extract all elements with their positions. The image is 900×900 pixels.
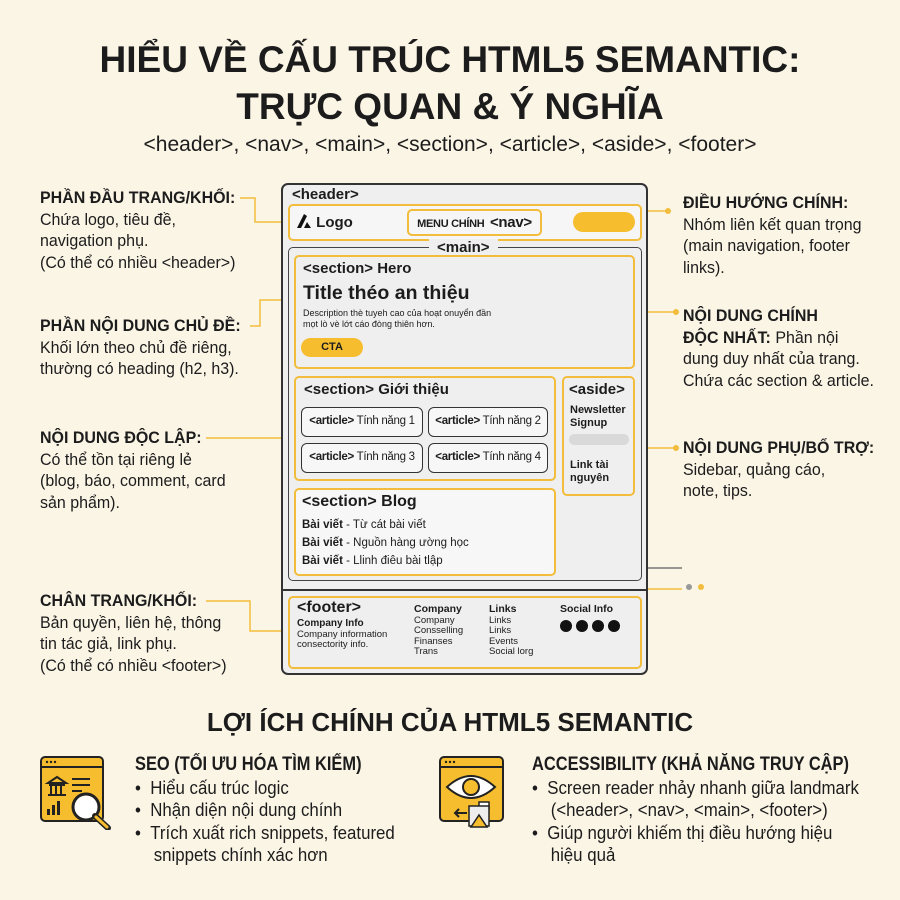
label: main: NỘI DUNG CHÍNH (683, 306, 818, 325)
hero section: Description thè tuyeh cao của hoạt onuyển đần (303, 308, 491, 318)
footer box: Company information (297, 628, 387, 640)
icon: accessibility (439, 756, 504, 828)
label: section (40, 316, 241, 378)
footer box: Trans (414, 646, 438, 657)
label: article: Có thể tồn tại riêng lẻ (40, 450, 192, 468)
footer box: Company (414, 614, 455, 626)
benefits heading: LỢI ÍCH CHÍNH CỦA HTML5 SEMANTIC (207, 707, 693, 737)
pill (573, 212, 635, 232)
aside: Link tài (570, 459, 609, 471)
subtitle: <header>, <nav>, <main>, <section>, <article>, <aside>, <footer> (144, 133, 756, 156)
label: aside (683, 438, 874, 500)
text: accessibility: ACCESSIBILITY (KHẢ NĂNG TRUY CẬP) (532, 754, 849, 775)
label: header: navigation phụ. (40, 231, 148, 250)
text: seo: • Hiểu cấu trúc logic (135, 776, 289, 798)
title (100, 38, 800, 127)
aside: Newsletter (570, 404, 626, 416)
label: main (683, 306, 874, 390)
label: section: Khối lớn theo chủ đề riêng, (40, 338, 232, 356)
social icons (560, 620, 620, 632)
footer box: Social lorg (489, 646, 533, 657)
section gioi thieu: <article> Tính năng 1 (309, 415, 415, 427)
section gioi thieu: <article> Tính năng 4 (435, 451, 541, 463)
text: seo: • Trích xuất rich snippets, featured (135, 822, 395, 842)
label: footer: Bản quyền, liên hệ, thông (40, 612, 221, 632)
nav: MENU CHÍNH <nav> (417, 214, 532, 231)
label: header: (Có thể có nhiều <header>) (40, 252, 235, 272)
title: HIỂU VỀ CẤU TRÚC HTML5 SEMANTIC: (100, 39, 800, 80)
blog section (294, 488, 556, 576)
section gioi thieu (294, 376, 556, 481)
hero section: mọt lò vè lớt cáo đòng thiên hơn. (303, 319, 435, 329)
aside: <aside> (569, 381, 625, 398)
wireframe (281, 183, 648, 675)
label: article (40, 428, 226, 512)
aside (562, 376, 635, 496)
blog section: <section> Blog (302, 493, 417, 510)
label: article: (blog, báo, comment, card (40, 471, 226, 490)
footer box: Links (489, 603, 516, 615)
text: accessibility (532, 753, 859, 865)
text: seo (135, 753, 395, 865)
text: seo: SEO (TỐI ƯU HÓA TÌM KIẾM) (135, 754, 362, 775)
footer box: Consselling (414, 625, 463, 636)
label: section: thường có heading (h2, h3). (40, 359, 239, 378)
nav (407, 209, 542, 236)
blog section: Bài viết - Nguồn hàng ường học (302, 537, 469, 549)
label: nav: links). (683, 258, 725, 276)
footer divider (281, 589, 648, 591)
footer box: Links (489, 614, 511, 626)
text: accessibility: • Giúp người khiếm thị điều hướng hiệu (532, 822, 832, 842)
hero section (294, 255, 635, 369)
logo: Logo (316, 214, 353, 231)
title: TRỰC QUAN & Ý NGHĨA (236, 86, 664, 127)
label: footer (40, 591, 227, 674)
label: main: Chứa các section & article. (683, 370, 874, 390)
footer box: Company Info (297, 618, 364, 629)
text: seo: snippets chính xác hơn (154, 844, 328, 865)
hero section: CTA (321, 341, 343, 353)
label: article: sản phẩm). (40, 492, 120, 512)
text: seo: • Nhận diện nội dung chính (135, 799, 342, 820)
text: accessibility: hiệu quả (551, 844, 615, 865)
label: nav: ĐIỀU HƯỚNG CHÍNH: (683, 193, 848, 212)
section gioi thieu: <article> Tính năng 3 (309, 451, 415, 463)
footer box: <footer> (297, 599, 361, 616)
label: article: NỘI DUNG ĐỘC LẬP: (40, 428, 202, 447)
label: header (40, 188, 235, 272)
label: nav: (main navigation, footer (683, 236, 850, 255)
main box (288, 247, 642, 581)
text: accessibility: • Screen reader nhảy nhanh giữa landmark (532, 776, 859, 798)
label: aside: Sidebar, quảng cáo, (683, 460, 825, 478)
footer box: Finanses (414, 636, 453, 646)
hero section: <section> Hero (303, 260, 411, 277)
logo (297, 214, 353, 231)
label: footer: CHÂN TRANG/KHỐI: (40, 591, 197, 610)
section gioi thieu: <section> Giới thiệu (304, 381, 449, 398)
label: nav (683, 193, 862, 276)
label: footer: (Có thể có nhiều <footer>) (40, 656, 227, 674)
label: nav: Nhóm liên kết quan trọng (683, 214, 862, 234)
blog section: Bài viết - Từ cát bài viết (302, 519, 426, 531)
header label: <header> (292, 186, 359, 203)
label: aside: note, tips. (683, 481, 752, 500)
label: aside: NỘI DUNG PHỤ/BỔ TRỢ: (683, 438, 874, 457)
label: footer: tin tác giả, link phụ. (40, 634, 177, 653)
main label: <main> (437, 239, 490, 256)
label: main: dung duy nhất của trang. (683, 349, 860, 368)
section gioi thieu: <article> Tính năng 2 (435, 415, 541, 427)
blog section: Bài viết - Llinh điêu bài tlập (302, 555, 443, 567)
label: main: ĐỘC NHẤT: Phần nội (683, 328, 838, 346)
aside: Signup (570, 417, 607, 429)
aside: nguyên (570, 472, 609, 484)
footer box: Social Info (560, 603, 613, 615)
footer box: consectority info. (297, 639, 368, 650)
footer box (288, 596, 642, 669)
footer box: Links (489, 625, 511, 636)
footer box: Company (414, 603, 462, 615)
hero section: Title théo an thiệu (303, 282, 469, 304)
text: accessibility: (<header>, <nav>, <main>, <footer>) (551, 799, 828, 820)
icon: seo (40, 756, 111, 830)
label: header: Chứa logo, tiêu đề, (40, 210, 176, 228)
label: section: PHẦN NỘI DUNG CHỦ ĐỀ: (40, 316, 241, 335)
footer box: Events (489, 636, 518, 646)
header box (288, 204, 642, 241)
label: header: PHẦN ĐẦU TRANG/KHỐI: (40, 188, 235, 207)
